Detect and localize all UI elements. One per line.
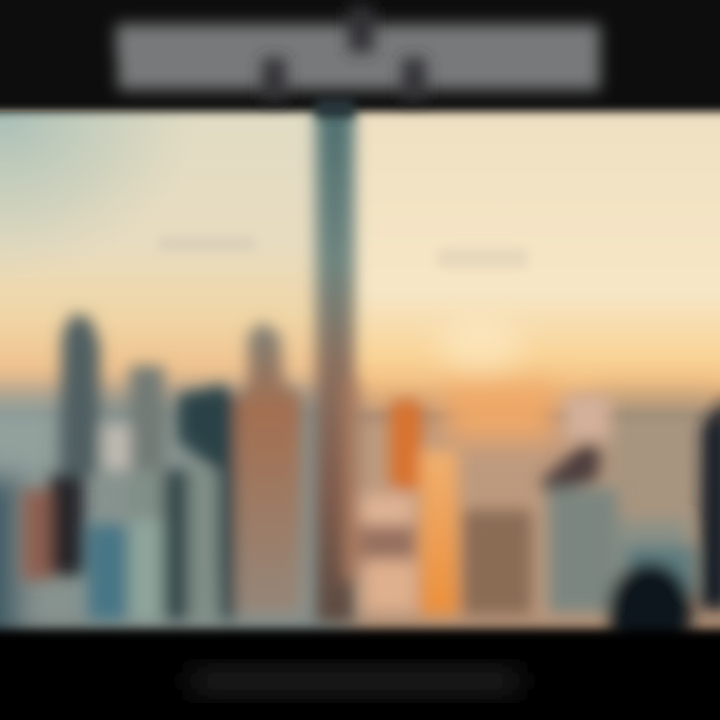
building: pale spire [565, 395, 610, 440]
tower top entering header [316, 100, 354, 118]
right caption (illegible) [438, 248, 528, 268]
building: dark teal block [178, 385, 235, 620]
footer band [0, 630, 720, 720]
building: dark slot [163, 470, 189, 620]
building: steel-blue base [625, 545, 695, 595]
sky: left [0, 105, 355, 415]
skyline photograph [0, 105, 720, 662]
building: dark cap [540, 442, 600, 494]
footer caption (illegible) [190, 670, 520, 692]
sun glow [438, 317, 522, 373]
building: pale lower left [362, 495, 412, 525]
building: left spire [60, 314, 100, 475]
building: teal base [88, 525, 128, 620]
building: dark right edge tower [700, 395, 720, 610]
heading dark gaps [262, 6, 426, 100]
central tower [316, 108, 354, 623]
building: grey-green tower [548, 488, 618, 613]
building: pale green tower [128, 470, 218, 620]
building: grey tower [130, 366, 164, 470]
buildings [22, 108, 720, 662]
building: dark lower block [50, 475, 84, 575]
building: olive mid block [462, 510, 532, 615]
sky [0, 105, 720, 415]
left caption (illegible) [158, 236, 256, 252]
building: dark foreground dome [608, 562, 692, 662]
building: glowing golden column [420, 450, 458, 615]
heading (illegible) [116, 24, 600, 90]
building: rust block [22, 490, 50, 580]
building: pale highlight [103, 425, 130, 470]
header band [0, 0, 720, 118]
city haze [0, 385, 720, 642]
building: brown tower [236, 322, 302, 615]
building: orange tower [390, 400, 422, 490]
sky: right [355, 105, 720, 415]
sky: teal haze upper left [0, 112, 200, 282]
